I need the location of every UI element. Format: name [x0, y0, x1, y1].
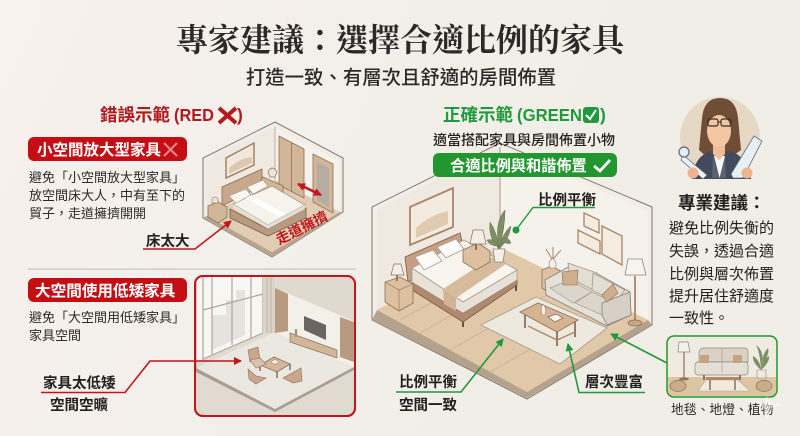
- label pill: small room large furniture: 小空間放大型家具: [37, 140, 162, 159]
- bed: [222, 169, 262, 206]
- wall painting: [410, 188, 453, 245]
- rug: [481, 297, 607, 364]
- callout: furniture too low: [41, 361, 241, 414]
- watermark sparkle: [758, 396, 782, 420]
- illustration: large room with low furniture: [195, 276, 356, 416]
- label pill: small room large furniture: [28, 137, 187, 161]
- callout: rich layers: [568, 344, 645, 392]
- nightstand right: [463, 230, 490, 270]
- thumbnail caption: 地毯、地燈、植物: [671, 402, 774, 417]
- text block: small room description: 放空間床大人，中有至下的: [29, 188, 185, 203]
- callout: balanced proportion bottom: [396, 339, 503, 414]
- heading: correct example: ): [600, 105, 606, 125]
- icon: designer portrait: [679, 97, 762, 179]
- thumbnail: accessories: [667, 336, 777, 397]
- text block: large room description: 家具空間: [29, 328, 81, 343]
- callout: balanced proportion top: 比例平衡: [538, 191, 596, 209]
- plant: [487, 210, 511, 262]
- callout: balanced proportion bottom: 空間一致: [399, 396, 457, 414]
- nightstand left: [385, 264, 413, 311]
- subtitle: 打造一致、有層次且舒適的房間佈置: [246, 67, 556, 89]
- side table and vase: [542, 247, 562, 290]
- callout: furniture too low: 家具太低矮: [43, 374, 116, 392]
- heading: wrong example: (RED: [174, 105, 214, 125]
- label pill: large room low furniture: [28, 278, 187, 302]
- sofa: [545, 263, 631, 326]
- title: 專家建議：選擇合適比例的家具: [176, 22, 628, 58]
- illustration: crowded small bedroom: [203, 122, 343, 257]
- text block: expert advice: 比例與層次佈置: [669, 266, 774, 283]
- callout: balanced proportion bottom: 比例平衡: [399, 373, 457, 391]
- text block: small room description: 貿子，走道擁擠開開: [29, 206, 146, 221]
- coffee table: [520, 303, 578, 346]
- text block: expert advice: 失誤，透過合適: [669, 242, 774, 260]
- corridor arrow: [298, 184, 321, 195]
- text block: expert advice: 提升居住舒適度: [669, 287, 774, 305]
- text block: large room description: 避免「大空間用低矮家具」: [29, 310, 185, 325]
- pill: proper proportion: 合適比例與和諧佈置: [450, 157, 587, 175]
- corridor label: 走道擁擠: [273, 208, 330, 248]
- text block: small room description: 避免「小空間放大型家具」: [29, 170, 185, 185]
- text block: expert advice: 一致性。: [669, 310, 729, 327]
- heading: correct example: (GREEN: [517, 105, 582, 125]
- heading: wrong example: ): [237, 105, 243, 125]
- picture frames: [578, 213, 622, 265]
- panel: correct example: [372, 105, 667, 414]
- panel: wrong examples: [28, 105, 356, 416]
- callout: rich layers: 層次豐富: [585, 373, 643, 391]
- arrow: to accessories thumbnail: [611, 334, 667, 363]
- callout: bed too big: 床太大: [146, 232, 190, 250]
- floor lamp: [625, 259, 646, 326]
- main room illustration: [372, 143, 652, 399]
- callout: bed too big: [143, 221, 231, 250]
- callout: furniture too low: 空間空曠: [50, 396, 108, 414]
- heading: expert advice: 專業建議：: [678, 193, 766, 213]
- label pill: large room low furniture: 大空間使用低矮家具: [35, 281, 176, 300]
- callout: balanced proportion top: [512, 191, 596, 234]
- subheading: 適當搭配家具與房間佈置小物: [433, 132, 615, 148]
- text block: expert advice: 避免比例失衡的: [669, 220, 774, 237]
- heading: correct example: 正確示範: [443, 105, 513, 125]
- heading: wrong example: 錯誤示範: [100, 105, 170, 125]
- heading: wrong example: [100, 105, 243, 125]
- panel: expert advice: [667, 97, 782, 420]
- pill: proper proportion: [433, 153, 617, 177]
- heading: correct example: [443, 105, 606, 125]
- bed: [405, 233, 517, 327]
